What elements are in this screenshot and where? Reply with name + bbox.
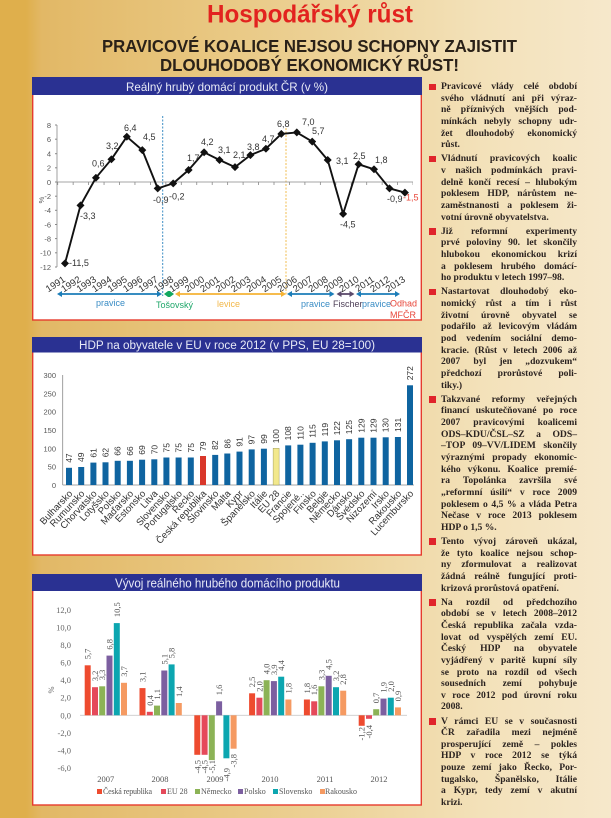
value labels: 3,2 — [331, 671, 341, 681]
bullet 7: se proto na rozdíl od všech — [441, 666, 577, 678]
bars: Rakousko — [121, 683, 401, 749]
value labels: 3,1 — [138, 671, 148, 682]
bars: Německo — [99, 680, 379, 760]
bullet 4: kracie. (Růst v letech 2006 až — [441, 345, 577, 356]
bullet 1: svého vládnutí ani při výraz- — [441, 93, 577, 104]
panel heading — [32, 337, 422, 352]
bullet 7: lovat od vyspělých zemí EU. — [441, 632, 577, 643]
subtitle — [102, 35, 517, 75]
value labels: 2,8 — [338, 674, 348, 685]
data labels: 6,8 — [277, 119, 290, 129]
value labels: 3,2 — [90, 671, 100, 681]
bars: EU 28 — [92, 687, 372, 755]
country labels: Rakousko — [367, 489, 404, 527]
value labels: 61 — [88, 448, 98, 458]
y axis — [43, 371, 414, 490]
country labels: Lucembursko — [369, 489, 416, 538]
y axis: 2,0 — [60, 693, 71, 703]
year labels: 2003 — [229, 274, 253, 295]
value labels: 3,7 — [119, 666, 129, 677]
bullet 5: 2007 pravicovými koalicemi — [441, 417, 577, 428]
bullet 1: mínkách nebyly schopny udr- — [441, 116, 577, 127]
value labels: 5,7 — [83, 649, 93, 659]
value labels: 1,1 — [152, 689, 162, 700]
arrow: pravice 1991-1997 — [57, 291, 162, 297]
country labels: Česká republika — [154, 488, 210, 546]
subtitle: DLOUHODOBÝ EKONOMICKÝ RŮST! — [160, 53, 459, 75]
data labels: -0,9 — [153, 195, 169, 205]
bullet 7: vyjádřený v paritě kupní síly — [441, 655, 577, 666]
country labels: Švédsko — [334, 489, 367, 523]
year labels — [44, 274, 408, 295]
value labels: -4,5 — [200, 760, 210, 773]
year labels: 2000 — [183, 274, 207, 295]
panel heading: Reálný hrubý domácí produkt ČR (v %) — [126, 79, 328, 94]
year labels: 2010 — [262, 774, 278, 784]
country labels: Slovensko — [134, 489, 173, 528]
bullet 5: poklesem o 4,5 % a vláda Petra — [441, 499, 577, 510]
data labels: 2,5 — [353, 151, 366, 161]
bullet 6: Tento vývoj zároveň ukázal, — [441, 536, 577, 547]
y axis: 0 — [52, 481, 56, 490]
y axis: 4,0 — [60, 675, 71, 685]
legend: Slovensko — [279, 787, 312, 796]
country labels: Francie — [265, 489, 294, 519]
value labels: 97 — [247, 435, 257, 444]
country labels — [38, 488, 416, 546]
panel: real GDP development grouped bars — [32, 574, 422, 806]
government labels: Odhad — [390, 299, 417, 309]
value labels: 129 — [356, 418, 366, 433]
data labels: 2,1 — [233, 150, 246, 160]
value labels: 2,5 — [247, 677, 257, 687]
country labels: Litva — [139, 488, 161, 511]
bullet 8: V rámci EU se v současnosti — [441, 716, 577, 727]
bullet 5: ra Topolánka završila své — [441, 475, 577, 486]
legend: Německo — [201, 787, 232, 796]
bullet 4: nomický růst a tím i růst — [441, 298, 577, 309]
value labels: 1,4 — [174, 686, 184, 697]
data labels: -1,5 — [403, 193, 419, 203]
year labels: 2005 — [260, 274, 284, 295]
year labels: 2001 — [198, 274, 222, 295]
data labels: 3,1 — [218, 145, 231, 155]
data labels: 1,8 — [375, 155, 388, 165]
value labels: 47 — [64, 453, 74, 463]
y axis: 150 — [43, 426, 56, 435]
government labels: pravice — [301, 299, 330, 309]
title: Hospodářský růst — [207, 0, 414, 28]
bullet 5: kého výkonu. Koalice premié- — [441, 464, 577, 475]
value labels: 70 — [149, 445, 159, 454]
country labels: Lotyšsko — [78, 489, 112, 524]
y axis: 200 — [43, 408, 56, 417]
year labels: 2007 — [291, 274, 315, 295]
data labels: 4,7 — [262, 134, 275, 144]
panel heading: Vývoj reálného hrubého domácího produktu — [115, 576, 340, 590]
value labels: -3,8 — [229, 754, 239, 767]
subtitle: PRAVICOVÉ KOALICE NEJSOU SCHOPNY ZAJISTIT — [102, 35, 517, 56]
y axis: -6,0 — [58, 763, 71, 773]
data labels: 6,4 — [124, 123, 137, 133]
value labels: 91 — [234, 437, 244, 447]
value labels: 62 — [100, 448, 110, 457]
value labels: 4,5 — [324, 659, 334, 670]
bullet 8 — [429, 716, 578, 808]
bullet 4: tiky.) — [441, 380, 462, 391]
bullet 6 — [429, 536, 577, 594]
year labels: 1998 — [152, 274, 176, 295]
value labels: 1,6 — [214, 685, 224, 695]
y axis: 300 — [43, 371, 56, 380]
country labels: Finsko — [291, 489, 319, 517]
bullet 5: výraznými propady ekonomic- — [441, 452, 577, 463]
year labels: 1994 — [90, 274, 114, 295]
value labels: 75 — [174, 443, 184, 452]
data labels — [69, 117, 419, 268]
value labels — [64, 366, 415, 463]
value labels: 125 — [344, 420, 354, 434]
data labels: -0,2 — [169, 191, 185, 201]
year labels: 2007 — [97, 774, 114, 784]
bullet 7: Česká republika začala vzda- — [441, 620, 577, 631]
value labels: 75 — [161, 443, 171, 452]
y axis: 4 — [47, 150, 51, 158]
bullet 3: hlubokou ekonomickou krizí — [441, 249, 577, 260]
data labels: 3,1 — [336, 156, 349, 166]
country labels: Belgie — [305, 489, 331, 516]
value labels: -0,4 — [364, 724, 374, 738]
value labels: 122 — [332, 421, 342, 435]
country labels: Estonsko — [113, 489, 148, 525]
value labels: 100 — [271, 429, 281, 443]
year labels: 2010 — [338, 274, 361, 295]
value labels: 5,8 — [167, 648, 177, 658]
country labels: Dánsko — [325, 489, 355, 520]
government labels — [96, 298, 417, 320]
bullet 2: votní úrovně obyvatelstva. — [441, 212, 549, 223]
value labels: 129 — [368, 418, 378, 433]
value labels: 86 — [222, 439, 232, 448]
y axis: % — [37, 196, 46, 203]
government labels: levice — [217, 299, 240, 309]
y axis: -8 — [44, 234, 51, 244]
bullet 2: delně končí recesí – hlubokým — [441, 177, 577, 188]
bullet 6: že tyto koalice nejsou schop- — [441, 548, 577, 559]
bars: Polsko — [106, 656, 386, 715]
value labels: 5,1 — [159, 654, 169, 664]
country labels: Irsko — [370, 489, 392, 511]
value labels: 10,5 — [112, 602, 122, 617]
value labels: 1,9 — [378, 682, 388, 693]
data labels: 3,8 — [247, 142, 260, 152]
y axis: -2,0 — [58, 728, 71, 738]
bullet 8: krizi. — [441, 797, 463, 808]
y axis: 100 — [43, 444, 56, 453]
y axis: 250 — [43, 389, 56, 398]
y axis: 6,0 — [60, 658, 71, 668]
text column: bullet points — [429, 81, 578, 808]
y axis: 12,0 — [56, 605, 71, 615]
value labels: 1,6 — [309, 685, 319, 695]
panel: real GDP line chart — [32, 77, 422, 321]
year labels: 1995 — [106, 274, 129, 295]
year labels: 2006 — [276, 274, 299, 295]
value labels: 4,4 — [276, 659, 286, 671]
value labels: 69 — [137, 445, 147, 455]
country labels: Malta — [209, 488, 234, 513]
year labels: 1999 — [168, 274, 191, 295]
value labels: -4,5 — [192, 760, 202, 773]
bullet 6: ny zformulovat a realizovat — [441, 559, 577, 570]
bullet 4: životní úrovně obyvatel se — [441, 310, 577, 321]
value labels — [83, 602, 403, 781]
country labels: Maďarsko — [99, 489, 136, 527]
bullet 5: HDP o 1,5 %. — [441, 522, 497, 533]
country labels: Kypr — [224, 488, 246, 510]
bullet 4: podařilo až levicovým vládám — [441, 321, 577, 332]
value labels: 0,9 — [393, 691, 403, 701]
bullet 2: zaměstnanosti a poklesem ži- — [441, 200, 577, 211]
value labels: 66 — [113, 446, 123, 456]
value labels: 115 — [308, 424, 318, 438]
bullet 1: růst. — [441, 139, 460, 150]
value labels: 6,8 — [104, 639, 114, 650]
bullet 7 — [429, 597, 577, 712]
data labels: 5,7 — [312, 126, 325, 136]
panel heading — [32, 77, 422, 95]
bullet 8: pouze zemí jako Řecko, Por- — [441, 762, 577, 773]
country labels: Chorvatsko — [58, 489, 100, 532]
bullet 4: 2007 byl jen „dozvukem“ — [441, 356, 577, 367]
data labels: 3,2 — [106, 141, 119, 151]
country labels: Německo — [308, 489, 343, 526]
bars: Slovensko — [114, 623, 394, 758]
value labels: 2,0 — [254, 681, 264, 692]
y axis: 0 — [47, 178, 51, 187]
bullet 5: ODS–KDU/ČSL–SZ a ODS– — [441, 429, 577, 440]
y axis: 2 — [47, 164, 51, 172]
y axis: 6 — [47, 135, 51, 144]
y axis: 8 — [47, 121, 51, 130]
bullet 6: krizová prorůstová opatření. — [441, 583, 559, 594]
value labels: 1,8 — [302, 683, 312, 694]
bullet 3: Již reformní experimenty — [441, 226, 577, 237]
year labels: 1997 — [137, 274, 160, 295]
country labels: Bulharsko — [38, 489, 75, 527]
country labels: Polsko — [96, 489, 124, 517]
y axis: -12 — [40, 263, 51, 272]
bullet 7: Český HDP na obyvatele — [441, 643, 577, 654]
government labels: pravice — [362, 299, 391, 309]
year labels: 2008 — [152, 774, 168, 784]
y axis: -10 — [40, 248, 51, 258]
year labels: 1992 — [59, 274, 83, 295]
value labels: -1,2 — [357, 727, 367, 740]
y axis: -4,0 — [58, 745, 71, 755]
government labels: MFČR — [390, 310, 416, 320]
government labels: pravice — [96, 298, 125, 308]
y axis: 50 — [48, 463, 56, 472]
arrow: Fischer — [336, 291, 354, 297]
bullet 4: pod vedením sociální demo- — [441, 333, 577, 344]
year labels: 2013 — [384, 274, 408, 295]
y axis: -2 — [44, 192, 51, 201]
country labels: EU 28 — [256, 489, 282, 516]
bullet 7: sousedních zemí pohybuje — [441, 678, 577, 689]
value labels: 99 — [259, 434, 269, 444]
value labels: 110 — [295, 426, 305, 440]
bars — [66, 385, 413, 485]
year labels: 2011 — [354, 274, 377, 295]
panel heading — [32, 574, 422, 591]
y axis: 10,0 — [56, 622, 71, 632]
arrow: pravice 2006-2009 — [287, 291, 334, 297]
year labels: 2002 — [214, 274, 238, 295]
legend: Česká republika — [103, 786, 152, 796]
year labels — [97, 774, 387, 784]
bullet 2: Vládnutí pravicových koalic — [441, 153, 577, 164]
bullet 8: a Kypr, tedy zemí v akutní — [441, 785, 577, 796]
year labels: 1991 — [44, 274, 68, 295]
bullet 7: období se v letech 2008–2012 — [441, 608, 577, 619]
value labels: 108 — [283, 426, 293, 440]
bullet 6: žádná reálně fungující proti- — [441, 571, 577, 582]
value labels: 3,3 — [316, 670, 326, 680]
value labels: 1,8 — [283, 683, 293, 694]
bullet 5: –TOP 09–VV/LIDEM skončily — [441, 440, 577, 451]
country labels: Itálie — [248, 489, 270, 511]
government labels: Tošovský — [156, 300, 194, 310]
bullet 1 — [429, 81, 578, 150]
bullet 5: Takzvané reformy veřejných — [441, 394, 577, 405]
year labels: 1993 — [75, 274, 99, 295]
country labels: Nizozemí — [344, 488, 380, 525]
data labels: -11,5 — [69, 258, 89, 268]
value labels: 119 — [320, 423, 330, 436]
legend: Polsko — [244, 787, 266, 796]
bars: Česká republika — [85, 665, 365, 755]
bullet 1: ně příznivých vnějších pod- — [441, 104, 577, 115]
y axis — [37, 121, 57, 272]
bullet 2: v našich podmínkách pravi- — [441, 165, 577, 176]
year labels: 2008 — [307, 274, 330, 295]
value labels: 66 — [125, 446, 135, 456]
line series — [65, 132, 405, 263]
y axis: % — [46, 686, 56, 694]
year labels: 2011 — [317, 774, 333, 784]
country labels: Slovinsko — [185, 489, 221, 526]
year labels: 2012 — [370, 774, 388, 784]
value labels: 131 — [393, 418, 403, 432]
year labels: 2012 — [368, 274, 392, 295]
icon: Tošovský diamond — [164, 291, 174, 297]
value labels: 130 — [381, 418, 391, 432]
country labels: Spojené.. — [271, 489, 307, 526]
bullet 3: ho produktu v letech 1997–98. — [441, 272, 564, 283]
country labels: Řecko — [170, 489, 197, 516]
bullet 2: poklesem HDP, nárůstem ne- — [441, 188, 577, 199]
data labels: 7,0 — [302, 117, 315, 127]
bullet 2 — [429, 153, 577, 223]
bullet 3 — [429, 226, 578, 283]
bullet 4: Nastartovat dlouhodobý eko- — [441, 286, 577, 297]
bullet 4 — [429, 286, 577, 391]
data labels: 1,7 — [187, 153, 200, 163]
data labels: 4,2 — [201, 137, 214, 147]
data labels: 0,6 — [92, 159, 105, 169]
bullet 7: 2008. — [441, 701, 463, 712]
bullet 8: tugalsko, Španělsko, Itálie — [441, 774, 577, 785]
y axis: 8,0 — [60, 640, 71, 650]
value labels: -4,9 — [221, 768, 231, 781]
value labels: 79 — [198, 441, 208, 451]
data labels: 4,5 — [143, 132, 156, 142]
value labels: 82 — [210, 440, 220, 450]
legend — [97, 786, 357, 796]
bullet 1: Pravicové vlády celé období — [441, 81, 577, 92]
bullet 8: ČR zařadila mezi nejméně — [441, 727, 577, 738]
year labels: 2004 — [245, 274, 269, 295]
country labels: Španělsko — [219, 489, 258, 529]
arrow: pravice 2010-2013 — [356, 291, 400, 297]
y axis: 0,0 — [60, 710, 71, 720]
data labels: -3,3 — [80, 211, 96, 221]
year labels: 1996 — [121, 274, 145, 295]
legend: EU 28 — [167, 787, 188, 796]
arrow: levice — [175, 291, 286, 297]
value labels: 75 — [186, 443, 196, 452]
country labels: Rumunsko — [48, 489, 87, 530]
data labels: -0,9 — [387, 194, 403, 204]
value labels: 49 — [76, 452, 86, 462]
value labels: 4,0 — [262, 664, 272, 674]
bullet 8: prosperující země – pokles — [441, 739, 577, 750]
country labels: Portugalsko — [142, 489, 185, 533]
bullet 7: Na rozdíl od předchozího — [441, 597, 577, 608]
data labels: -4,5 — [340, 220, 356, 230]
value labels: 3,3 — [97, 670, 107, 680]
government labels: Fischer — [333, 299, 363, 309]
bullet 4: předchozí prorůstové poli- — [441, 368, 577, 379]
bullet 5: „reformní úsilí“ v roce 2009 — [441, 487, 577, 498]
y axis — [46, 605, 71, 773]
bullet 1: žet dlouhodobý ekonomický — [441, 128, 577, 139]
bullet 5 — [429, 394, 578, 533]
year labels: 2009 — [322, 274, 346, 295]
year labels: 2009 — [206, 774, 224, 784]
panel heading: HDP na obyvatele v EU v roce 2012 (v PPS, EU 28=100) — [79, 340, 375, 352]
bullet 3: a poklesem hrubého domácí- — [441, 261, 577, 272]
y axis: -6 — [44, 220, 51, 230]
value labels: 0,4 — [145, 694, 155, 706]
legend: Rakousko — [325, 787, 357, 796]
bullet 5: Nečase v roce 2013 poklesem — [441, 510, 577, 521]
panel: GDP per capita bar chart — [32, 337, 422, 556]
bullet 7: v roce 2012 pod úrovní roku — [441, 690, 577, 701]
value labels: 0,7 — [371, 693, 381, 703]
value labels: 272 — [405, 366, 415, 380]
value labels: 2,0 — [386, 681, 396, 692]
value labels: 3,9 — [269, 664, 279, 675]
bullet 8: HDP v roce 2012 se týká — [441, 750, 577, 761]
bullet 5: financí uskutečňované po roce — [441, 405, 577, 416]
value labels: -5,1 — [207, 760, 217, 773]
y axis: -4 — [44, 206, 51, 215]
bullet 3: prvé poloviny 90. let skončily — [441, 237, 577, 248]
